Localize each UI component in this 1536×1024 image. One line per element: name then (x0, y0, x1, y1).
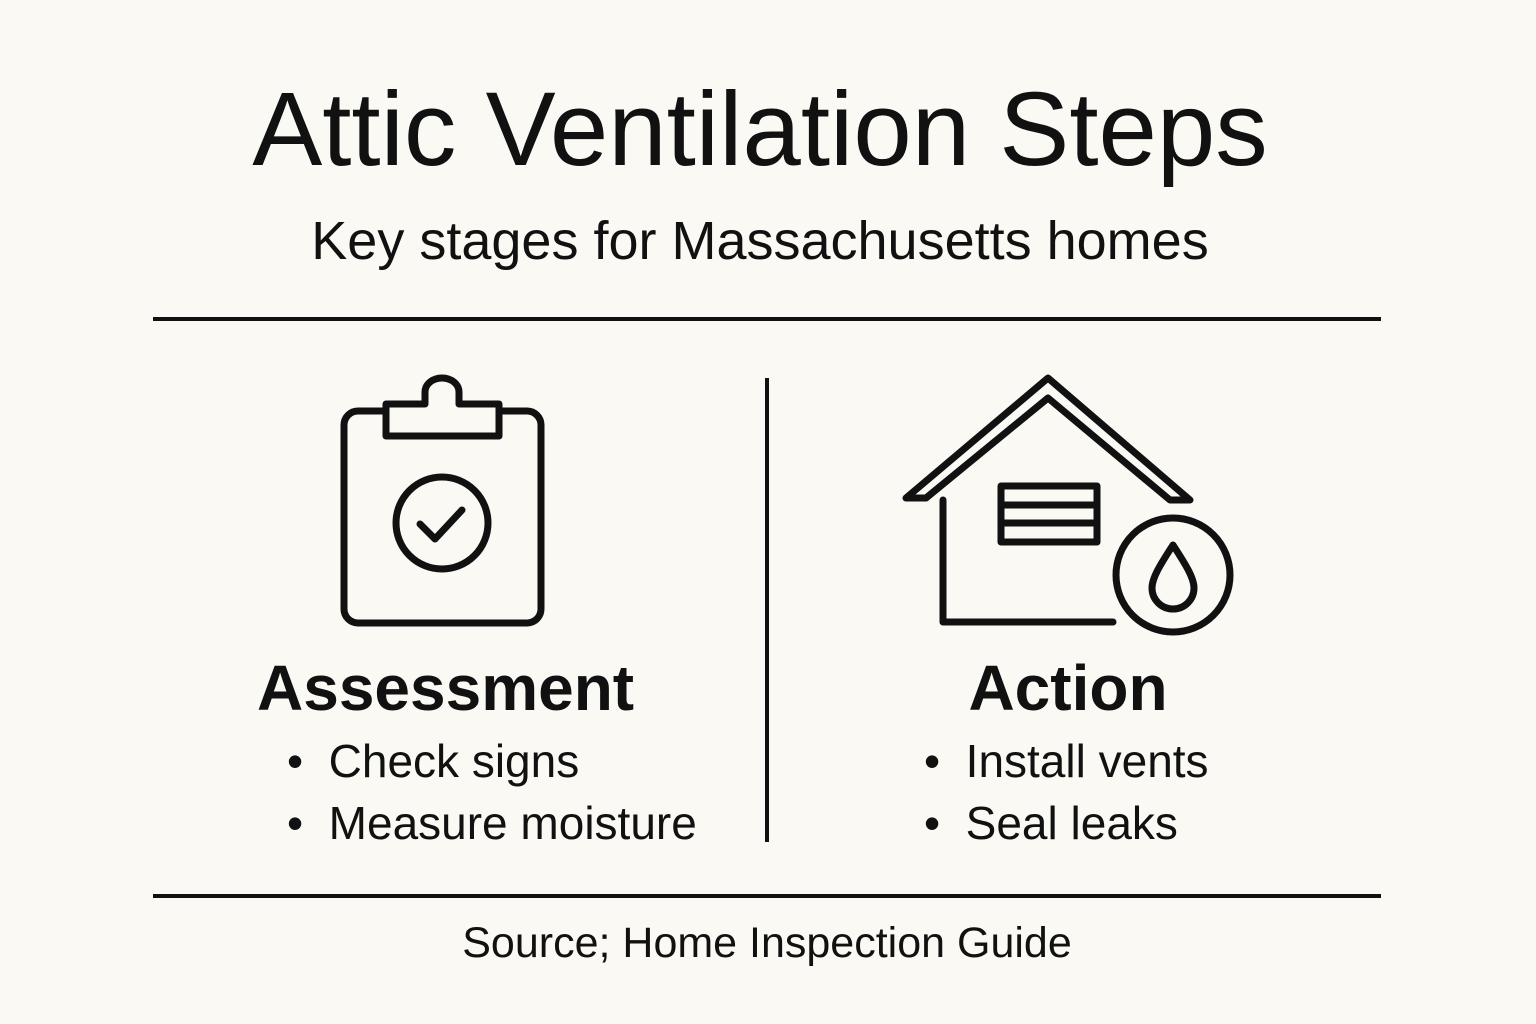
bullets: action (924, 735, 1209, 849)
bullets: assessment: • Measure moisture (287, 797, 697, 849)
subtitle: Key stages for Massachusetts homes (311, 211, 1209, 271)
bullets: action: • Install vents (924, 735, 1209, 787)
icon: clipboard with check (340, 374, 544, 626)
footer source: Source; Home Inspection Guide (462, 919, 1072, 967)
title: Attic Ventilation Steps (252, 71, 1268, 188)
heading: Assessment: Assessment (257, 652, 634, 724)
bullets: action: • Seal leaks (924, 797, 1178, 849)
icon: house with moisture drop (902, 374, 1234, 636)
heading: Action: Action (968, 652, 1168, 724)
bullets: assessment (287, 735, 697, 849)
bullets: assessment: • Check signs (287, 735, 579, 787)
